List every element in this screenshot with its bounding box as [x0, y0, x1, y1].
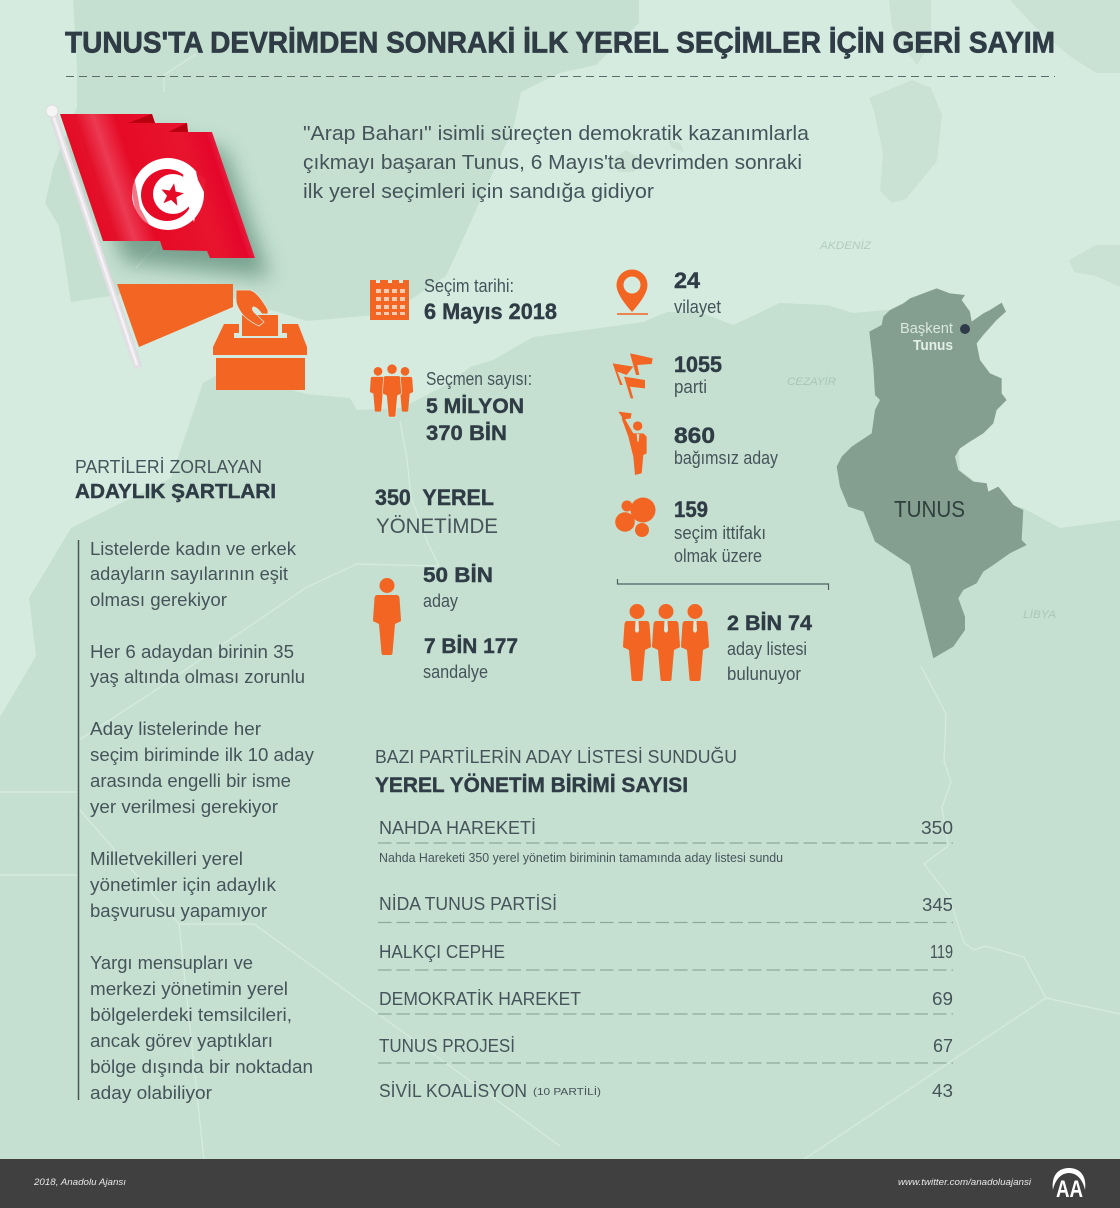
- candidates and seats: 50 BİN: [423, 563, 493, 587]
- heading: candidacy requirements: PARTİLERİ ZORLAYAN: [75, 457, 262, 477]
- candidates and seats: 7 BİN 177: [424, 634, 518, 658]
- icon: Tunisian flag on pole: [46, 105, 270, 365]
- row: Nida Tunus: 345: [922, 895, 953, 915]
- requirements list: [90, 539, 314, 1103]
- icon: map pin: [616, 270, 648, 314]
- icon: hand and ballot box: [117, 284, 307, 390]
- alliances: seçim ittifakı: [674, 523, 766, 543]
- heading: number of local government units: [375, 746, 737, 797]
- icon: party flags: [613, 353, 653, 398]
- requirements list: Aday listelerinde her: [90, 719, 261, 739]
- map: Tunisia: [837, 288, 1027, 658]
- independent candidates: [674, 423, 778, 468]
- map: Tunisia: TUNUS: [894, 496, 965, 522]
- candidates and seats: sandalye: [423, 662, 488, 682]
- heading: candidacy requirements: [75, 457, 276, 503]
- parties: [674, 352, 722, 397]
- heading: 350 local governments: YÖNETİMDE: [376, 515, 498, 538]
- candidate lists: 2 BİN 74: [727, 611, 812, 635]
- requirements list: adayların sayılarının eşit: [90, 564, 288, 584]
- map labels: CEZAYİR: [787, 376, 836, 388]
- icon: Anadolu Agency logo: AA: [1056, 1176, 1083, 1203]
- row: Sivil Koalisyon: 43: [932, 1081, 953, 1101]
- parties: parti: [674, 377, 707, 397]
- footer: www.twitter.com/anadoluajansi: [898, 1177, 1032, 1188]
- candidates and seats: aday: [423, 591, 458, 611]
- map labels: LİBYA: [1023, 609, 1056, 621]
- heading: candidacy requirements: ADAYLIK ŞARTLARI: [75, 481, 276, 503]
- map labels: [787, 240, 1056, 621]
- voter count: 370 BİN: [426, 421, 507, 445]
- independent candidates: 860: [674, 423, 715, 448]
- requirements list: Her 6 adaydan birinin 35: [90, 642, 294, 662]
- icon: three candidates: [623, 604, 709, 681]
- requirements list: Milletvekilleri yerel: [90, 849, 243, 869]
- row: Demokratik Hareket: 69: [932, 989, 953, 1009]
- voter count: [426, 369, 532, 445]
- row: Demokratik Hareket: [379, 989, 953, 1009]
- requirements list: yaş altında olması zorunlu: [90, 667, 305, 687]
- row: Nida Tunus: NİDA TUNUS PARTİSİ: [379, 894, 557, 914]
- requirements list: seçim biriminde ilk 10 aday: [90, 745, 314, 765]
- panel: candidacy requirements: [75, 457, 314, 1103]
- icon: voters: [370, 364, 413, 417]
- requirements list: Listelerde kadın ve erkek: [90, 539, 297, 559]
- heading: number of local government units: BAZI PARTİLERİN ADAY LİSTESİ SUNDUĞU: [375, 746, 737, 767]
- requirements list: bölgelerdeki temsilcileri,: [90, 1005, 292, 1025]
- icon: alliance circles: [615, 498, 656, 537]
- candidates and seats: [423, 563, 518, 682]
- icon: independent candidate: [618, 412, 647, 475]
- panel: party list table: [375, 746, 953, 1101]
- intro text: çıkmayı başaran Tunus, 6 Mayıs'ta devrimden sonraki: [303, 151, 802, 174]
- election date: [424, 276, 557, 324]
- requirements list: başvurusu yapamıyor: [90, 901, 267, 921]
- row: Sivil Koalisyon: (10 PARTİLİ): [533, 1085, 601, 1098]
- parties: 1055: [674, 352, 722, 377]
- requirements list: arasında engelli bir isme: [90, 771, 291, 791]
- row: Halkçı Cephe: HALKÇI CEPHE: [379, 942, 505, 962]
- map: Tunisia: Tunus: [913, 338, 953, 354]
- provinces: vilayet: [674, 297, 721, 317]
- election date: Seçim tarihi:: [424, 276, 514, 296]
- icon: Anadolu Agency logo: [1053, 1168, 1085, 1203]
- row: Tunus Projesi: TUNUS PROJESİ: [379, 1036, 515, 1056]
- provinces: [674, 268, 721, 317]
- row: Nahda: [379, 818, 953, 865]
- row: Nahda: NAHDA HAREKETİ: [379, 818, 536, 838]
- candidate lists: bulunuyor: [727, 664, 801, 684]
- requirements list: Yargı mensupları ve: [90, 953, 253, 973]
- row: Sivil Koalisyon: SİVİL KOALİSYON: [379, 1081, 527, 1101]
- requirements list: ancak görev yaptıkları: [90, 1031, 273, 1051]
- alliances: olmak üzere: [674, 546, 762, 566]
- row: Sivil Koalisyon: [379, 1081, 953, 1101]
- requirements list: bölge dışında bir noktadan: [90, 1057, 313, 1077]
- requirements list: merkezi yönetimin yerel: [90, 979, 288, 999]
- row: Nida Tunus: [379, 894, 953, 915]
- row: Demokratik Hareket: DEMOKRATİK HAREKET: [379, 989, 581, 1009]
- map: Tunisia: Başkent: [900, 321, 953, 337]
- independent candidates: bağımsız aday: [674, 448, 778, 468]
- heading: 350 local governments: [375, 485, 498, 538]
- heading: number of local government units: YEREL YÖNETİM BİRİMİ SAYISI: [375, 774, 688, 797]
- requirements list: olması gerekiyor: [90, 590, 227, 610]
- footer: 2018, Anadolu Ajansı: [33, 1177, 126, 1188]
- provinces: 24: [674, 268, 701, 293]
- row: Tunus Projesi: 67: [933, 1036, 953, 1056]
- icon: candidate: [373, 578, 401, 655]
- requirements list: yönetimler için adaylık: [90, 875, 277, 895]
- title: TUNUS'TA DEVRİMDEN SONRAKİ İLK YEREL SEÇİMLER İÇİN GERİ SAYIM: [65, 26, 1055, 60]
- intro text: ilk yerel seçimleri için sandığa gidiyor: [303, 180, 654, 203]
- bracket: [618, 579, 828, 590]
- heading: 350 local governments: 350 YEREL: [375, 485, 494, 510]
- requirements list: yer verilmesi gerekiyor: [90, 797, 278, 817]
- candidate lists: aday listesi: [727, 639, 807, 659]
- election date: 6 Mayıs 2018: [424, 299, 557, 324]
- row: Nahda: Nahda Hareketi 350 yerel yönetim biriminin tamamında aday listesi sundu: [379, 850, 783, 865]
- row: Nahda: 350: [921, 818, 953, 838]
- voter count: 5 MİLYON: [426, 394, 524, 418]
- alliances: 159: [674, 497, 708, 522]
- requirements list: aday olabiliyor: [90, 1083, 212, 1103]
- row: Halkçı Cephe: 119: [930, 942, 953, 962]
- row: Tunus Projesi: [379, 1036, 953, 1056]
- footer: [0, 1159, 1120, 1208]
- icon: calendar: [370, 280, 409, 320]
- candidate lists: [727, 611, 812, 684]
- voter count: Seçmen sayısı:: [426, 369, 532, 389]
- map labels: AKDENİZ: [819, 240, 872, 252]
- alliances: [674, 497, 766, 566]
- intro text: [303, 122, 810, 203]
- row: Halkçı Cephe: [379, 942, 953, 962]
- intro text: "Arap Baharı" isimli süreçten demokratik kazanımlarla: [303, 122, 810, 145]
